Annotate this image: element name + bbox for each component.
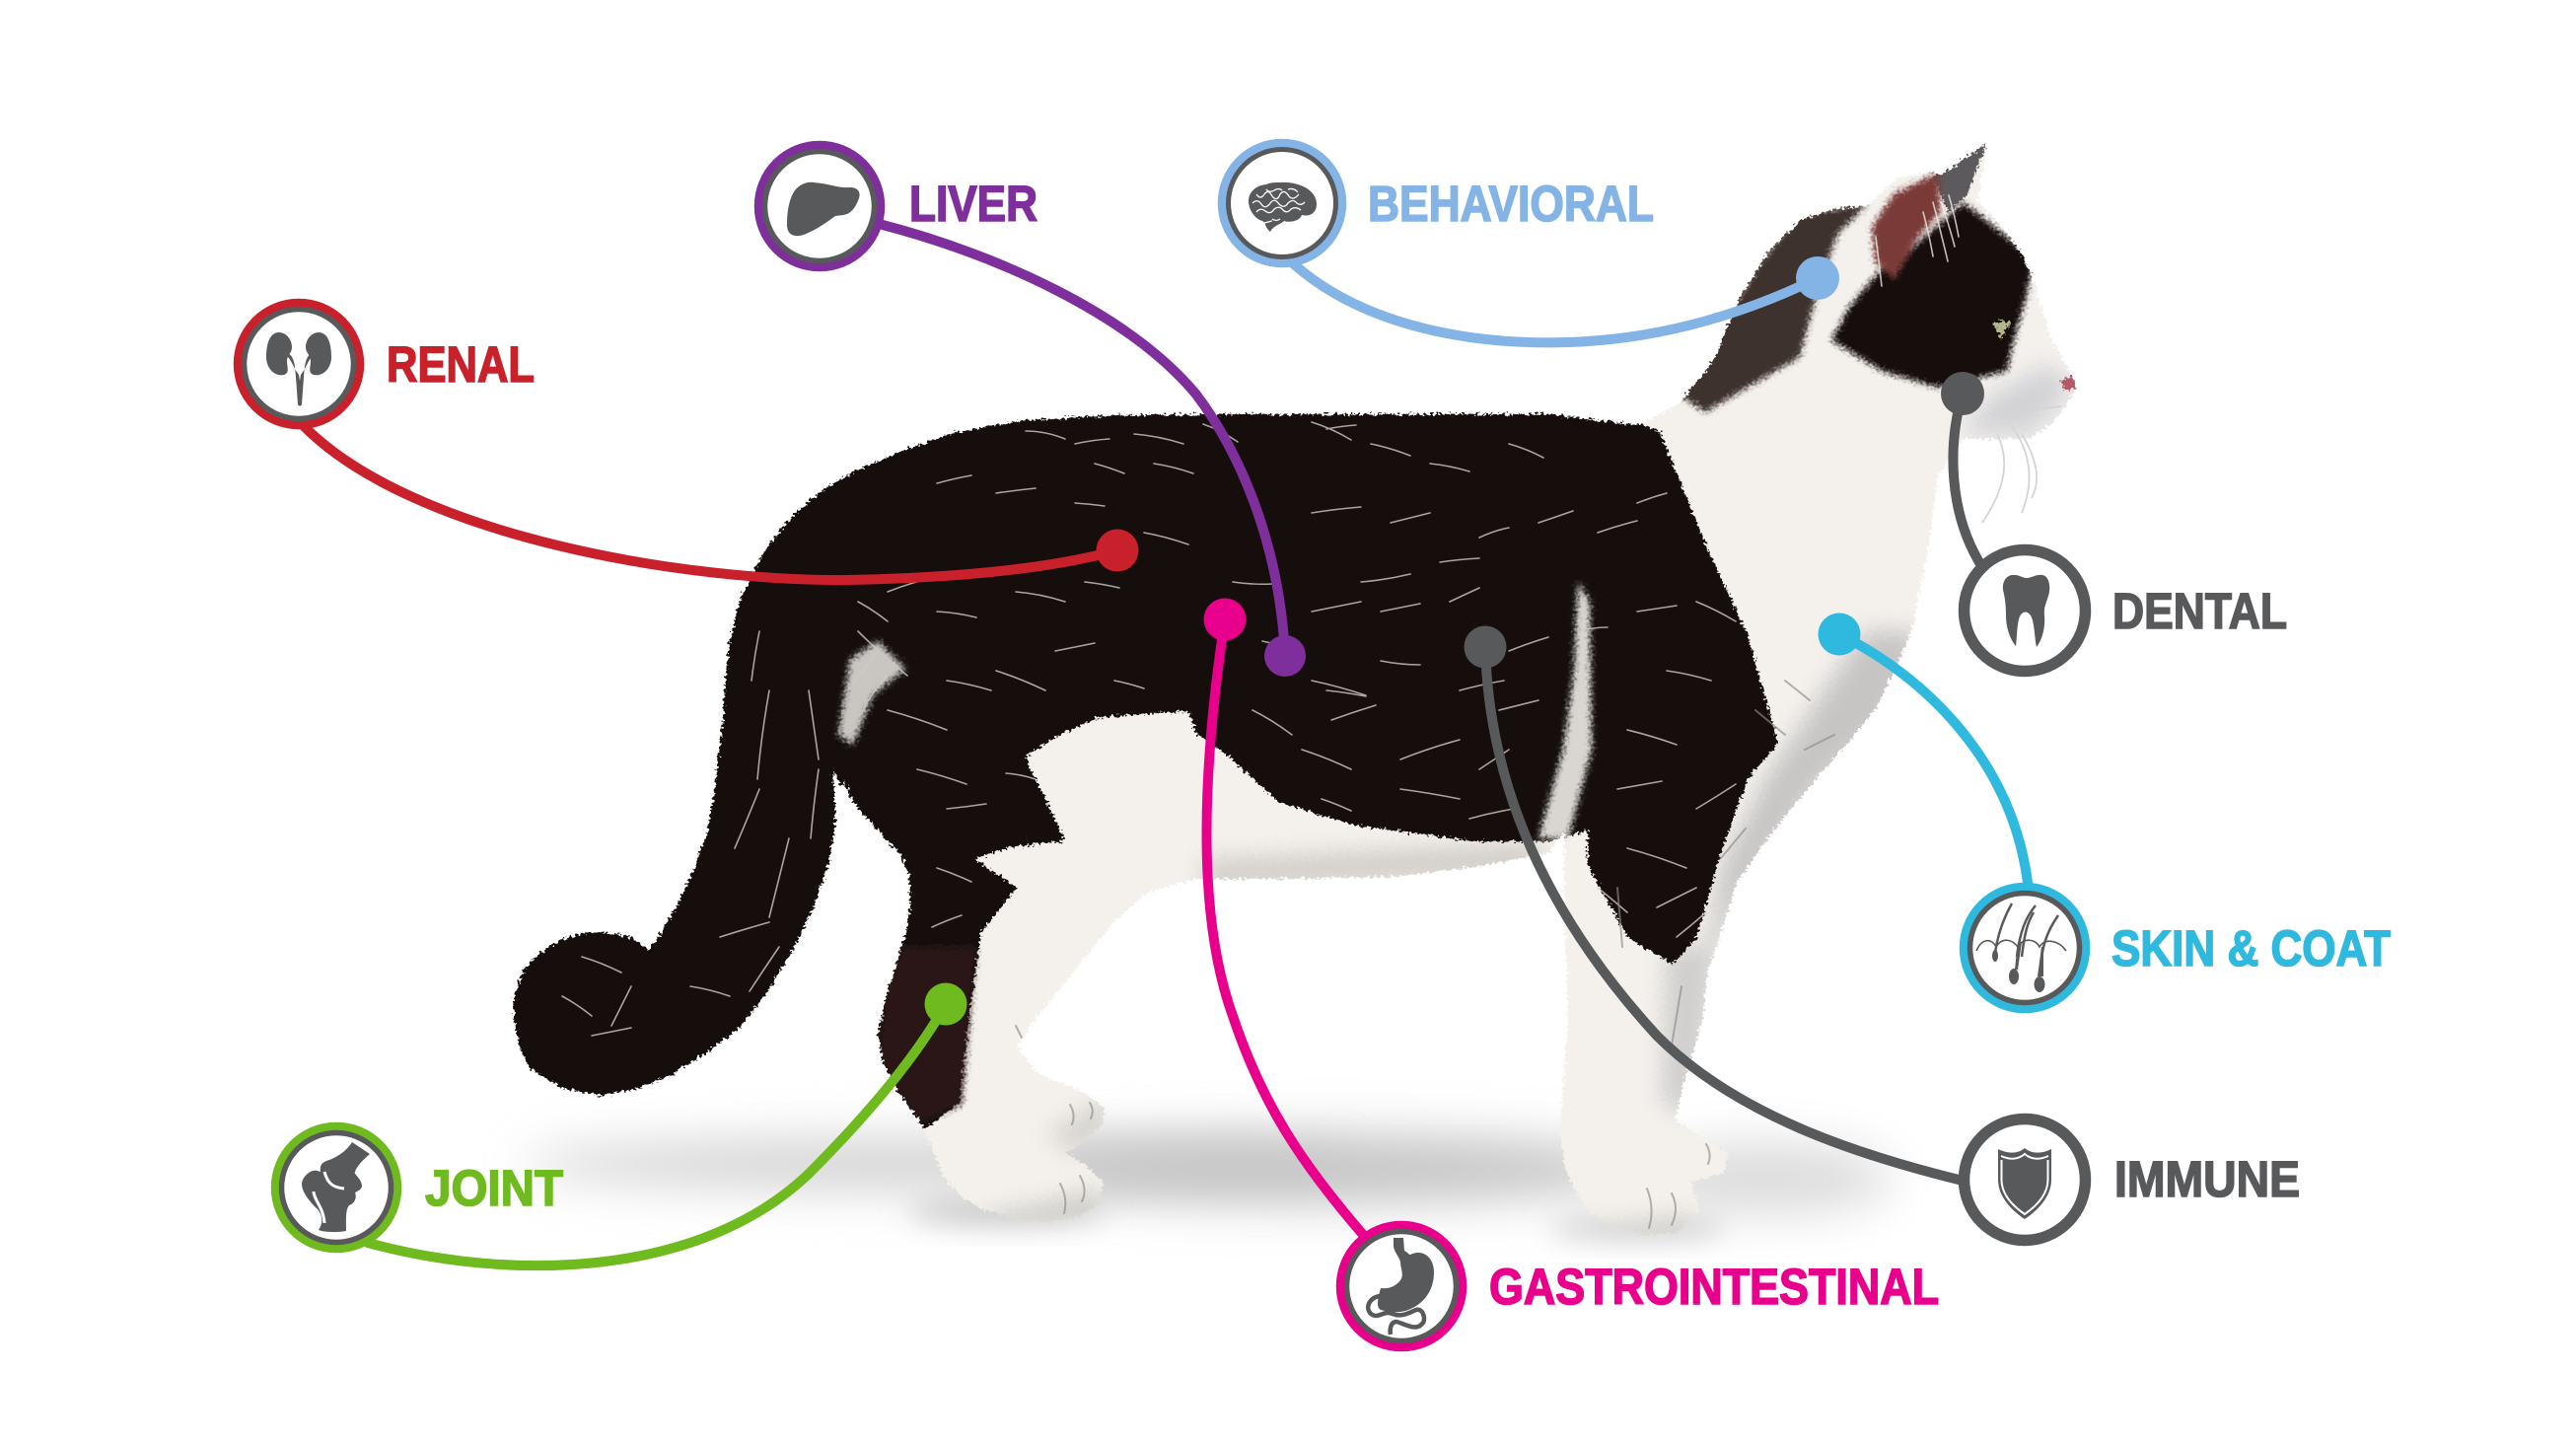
callout: joint: [271, 982, 966, 1265]
icon: tooth: [2003, 575, 2049, 647]
icon: shield: [1998, 1148, 2051, 1219]
renal dot: [1097, 529, 1138, 572]
head black patch: [1831, 202, 2034, 388]
whiskers: [1982, 406, 2061, 523]
neck dark patch: [1679, 202, 1869, 412]
renal leader line: [304, 426, 1117, 580]
liver leader line: [883, 225, 1285, 656]
label: immune: IMMUNE: [2114, 1151, 2300, 1207]
label: liver: LIVER: [909, 176, 1038, 232]
cat illustration: [493, 128, 2091, 1253]
dental leader line: [1953, 394, 1982, 567]
ear outer grey tip: [1933, 140, 1988, 212]
gastrointestinal badge ring: [1336, 1221, 1467, 1351]
icon: kidneys: [266, 332, 331, 406]
dental badge ring: [1965, 550, 2085, 671]
icon: brain: [1249, 182, 1317, 232]
black body, tail and hind leg patch: [493, 404, 1778, 1134]
renal badge ring: [234, 299, 364, 429]
liver dot: [1264, 635, 1306, 677]
callout: gastrointestinal: [1203, 598, 1939, 1351]
ear pink interior: [1872, 173, 1941, 280]
behavioral dot: [1796, 256, 1839, 300]
skin leader line: [1839, 634, 2028, 883]
fur highlights: [562, 195, 1959, 1036]
behavioral leader line: [1294, 264, 1818, 342]
joint leader line: [368, 1004, 946, 1265]
callout: behavioral: [1218, 139, 1839, 342]
behavioral badge ring: [1218, 139, 1346, 267]
gastrointestinal leader line: [1206, 619, 1365, 1237]
dark brown hind leg tone: [878, 947, 976, 1124]
white flank stripe: [1538, 582, 1592, 838]
callout: liver: [754, 141, 1306, 677]
immune leader line: [1485, 647, 1963, 1181]
callout: skin and coat: [1819, 614, 2391, 1013]
icon: stomach and intestine: [1368, 1238, 1434, 1335]
label: dental: DENTAL: [2112, 583, 2287, 639]
callout: immune: [1464, 625, 2300, 1241]
callout: dental: [1941, 372, 2287, 671]
chest and leg grey shading: [986, 365, 2076, 1243]
icon: hair follicles: [1976, 903, 2066, 992]
skin badge ring: [1960, 883, 2090, 1013]
label: gastrointestinal: GASTROINTESTINAL: [1489, 1259, 1939, 1315]
label: joint: JOINT: [425, 1160, 563, 1216]
toe lines and black fur on white coat: [1016, 681, 1834, 1228]
label: renal: RENAL: [387, 336, 535, 393]
skin dot: [1819, 614, 1860, 655]
icon: liver: [787, 182, 860, 236]
ground shadow: [523, 1135, 1894, 1240]
nose: [2061, 375, 2075, 391]
immune dot: [1464, 625, 1507, 669]
gastrointestinal dot: [1203, 598, 1247, 641]
label: behavioral: BEHAVIORAL: [1368, 176, 1654, 232]
liver badge ring: [754, 141, 885, 271]
dental dot: [1941, 372, 1984, 415]
icon: knee joint: [302, 1142, 370, 1232]
white hip marking: [838, 641, 905, 745]
label: skin and coat: SKIN & COAT: [2111, 920, 2391, 976]
immune badge ring: [1965, 1119, 2085, 1241]
eye: [1992, 322, 2011, 339]
callout: renal: [234, 299, 1138, 580]
cat white base coat: [493, 128, 2091, 1253]
joint badge ring: [271, 1122, 401, 1253]
joint dot: [925, 982, 966, 1026]
